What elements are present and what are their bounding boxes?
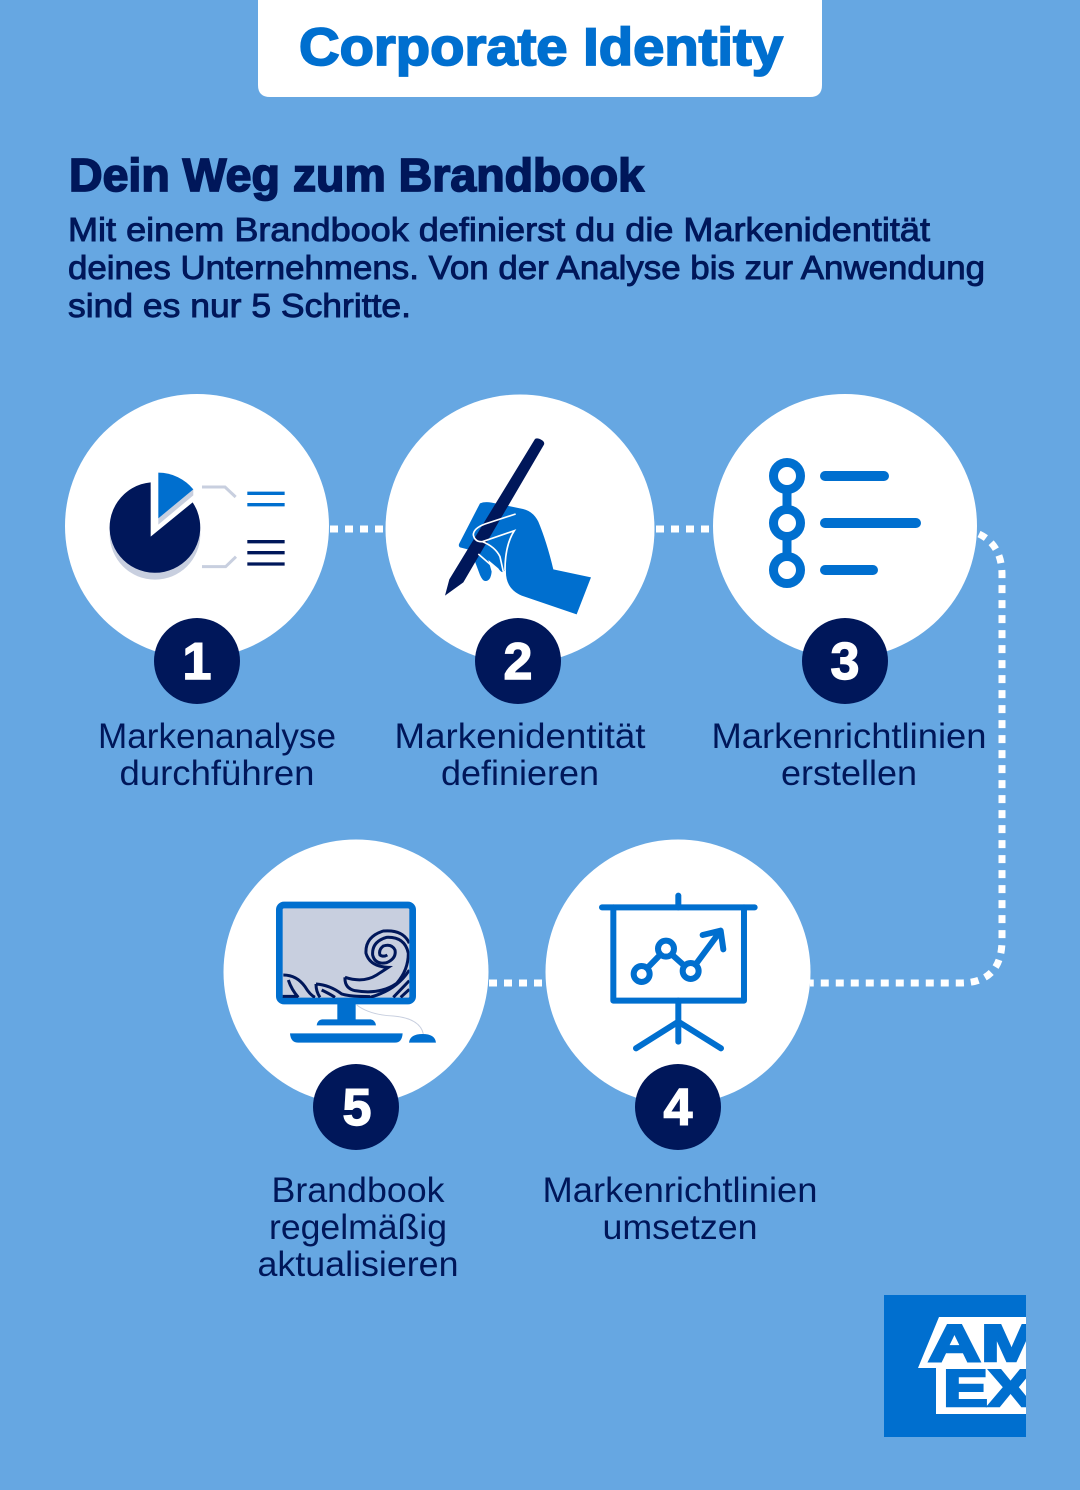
step 4: Markenrichtlinien umsetzen [546, 840, 810, 1104]
step labels: definieren [441, 754, 599, 793]
icon: pie chart [110, 473, 285, 580]
step labels: erstellen [781, 754, 917, 793]
step labels: umsetzen [602, 1208, 758, 1247]
logo: AMEX: AM [928, 1315, 1042, 1373]
step 2: Markenidentität [386, 394, 654, 664]
logo: AMEX: EX [943, 1360, 1033, 1418]
dotted connector path [330, 529, 1002, 983]
intro text [68, 211, 985, 324]
step labels: Markenidentität [394, 717, 646, 756]
step labels: aktualisieren [258, 1245, 458, 1284]
icon: presentation board [602, 896, 755, 1048]
intro text: deines Unternehmens. Von der Analyse bis zur Anwendung [68, 249, 985, 286]
step labels: durchführen [120, 754, 314, 793]
number badges: 1 [183, 633, 211, 691]
logo: AMEX [884, 1295, 1026, 1437]
number badges: 2 [504, 633, 532, 691]
step labels: regelmäßig [269, 1208, 447, 1247]
title banner [258, 0, 822, 97]
intro text: Mit einem Brandbook definierst du die Markenidentität [68, 211, 930, 248]
step labels: Markenrichtlinien [542, 1171, 818, 1210]
heading: Dein Weg zum Brandbook [69, 149, 644, 201]
step labels: Brandbook [272, 1171, 445, 1210]
icon: hand with pen [445, 438, 591, 614]
step labels: Markenrichtlinien [712, 717, 986, 756]
step labels [98, 717, 986, 1284]
step 1: Markenanalyse [65, 394, 329, 658]
icon: checklist timeline [774, 462, 916, 584]
number badges: 3 [831, 633, 859, 691]
number badges [154, 618, 888, 1150]
step 3: Markenrichtlinien erstellen [713, 394, 977, 658]
number badges: 4 [664, 1079, 693, 1137]
icon: desktop computer [279, 905, 436, 1043]
step 5: Brandbook aktualisieren [224, 840, 488, 1104]
title banner: Corporate Identity [299, 18, 784, 77]
number badges: 5 [343, 1079, 371, 1137]
intro text: sind es nur 5 Schritte. [68, 287, 411, 324]
step labels: Markenanalyse [98, 717, 336, 756]
